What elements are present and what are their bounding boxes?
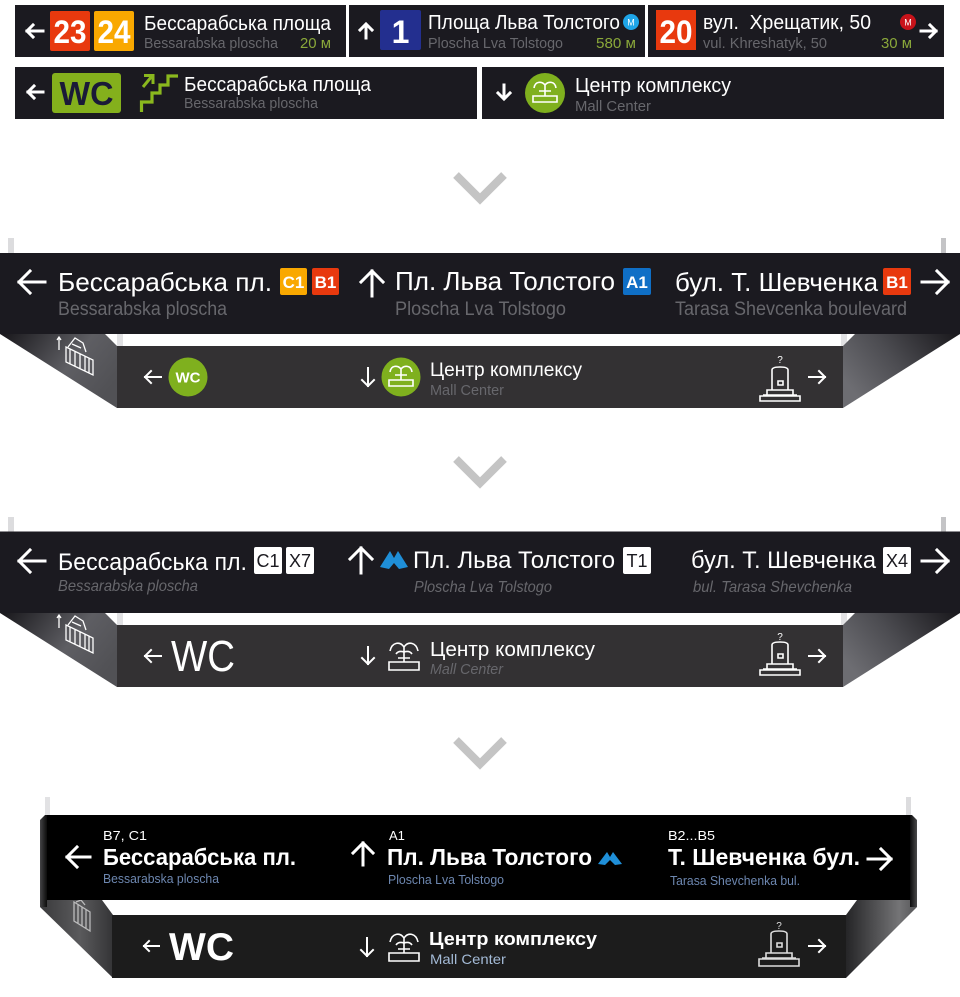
sign: Mall Center: Mall Center (575, 98, 651, 115)
sign: WC and stairs: Bessarabska ploscha (184, 95, 319, 112)
side panel: left (40, 900, 113, 978)
upper sign board: Пл. Льва Толстого (395, 266, 615, 296)
upper sign board: Пл. Льва Толстого (387, 844, 592, 870)
lower sign board: Mall Center (430, 951, 506, 967)
sign: Ploscha Lva Tolstogo: Ploscha Lva Tolstogo (428, 35, 563, 52)
lower sign board: Центр комплексу (429, 929, 597, 949)
upper sign board: C1 (283, 273, 304, 292)
arrow: chevron 2 (456, 459, 504, 483)
side panel: left (0, 334, 117, 408)
lower sign board (117, 346, 843, 408)
panel: sign option A (0, 238, 960, 408)
upper sign board: Tarasa Shevcenka boulevard (675, 299, 907, 320)
sign: Bessarabska ploscha: 23 (54, 14, 86, 50)
upper sign board: A1 (389, 828, 405, 843)
lower sign board: WC (169, 926, 234, 969)
sign: vul. Khreshatyk: 30 м (881, 35, 912, 52)
sign: WC and stairs: Бессарабська площа (184, 74, 372, 96)
sign: Ploscha Lva Tolstogo (349, 5, 645, 57)
upper sign board: bul. Tarasa Shevchenka (693, 579, 852, 596)
sign: WC and stairs: WC (60, 75, 114, 112)
upper sign board: Ploscha Lva Tolstogo (388, 872, 504, 887)
lower sign board (117, 625, 843, 687)
lower sign board (112, 915, 846, 978)
sign: Bessarabska ploscha: Bessarabska ploscha (144, 35, 279, 52)
side panel: left (0, 613, 117, 687)
sign: Bessarabska ploscha (15, 5, 346, 57)
upper sign board: Т. Шевченка бул. (668, 844, 860, 870)
lower sign board: WC (171, 632, 235, 681)
upper sign board: Ploscha Lva Tolstogo (414, 579, 552, 596)
upper sign board: Bessarabska ploscha (58, 299, 227, 320)
upper sign board: B1 (886, 273, 908, 292)
icon: metro M (380, 551, 408, 569)
upper sign board: T1 (626, 551, 648, 571)
upper sign board: B7, C1 (103, 828, 147, 843)
lower sign board: ? (776, 921, 782, 932)
side panel: right (843, 334, 960, 408)
upper sign board: B2...B5 (668, 828, 715, 843)
upper sign board: C1 (256, 551, 280, 571)
upper sign board: Tarasa Shevchenka bul. (670, 873, 800, 888)
upper sign board: бул. Т. Шевченка (691, 547, 877, 574)
upper sign board: X7 (289, 551, 311, 571)
icon: metro M (598, 852, 622, 865)
sign: Mall Center: Центр комплексу (575, 75, 731, 97)
upper sign board (0, 532, 960, 613)
sign: vul. Khreshatyk: 20 (660, 14, 692, 50)
panel: sign option B (0, 517, 960, 687)
upper sign board: Bessarabska ploscha (103, 871, 220, 886)
upper sign board: A1 (626, 273, 648, 292)
sign: vul. Khreshatyk: вул. Хрещатик, 50 (703, 12, 871, 34)
panel: top row signs (15, 5, 944, 119)
sign: Bessarabska ploscha: 20 м (300, 35, 331, 52)
panel: sign final (40, 797, 917, 978)
sign: Bessarabska ploscha: Бессарабська площа (144, 13, 332, 35)
upper sign board: B1 (315, 273, 336, 292)
arrow: chevron 3 (456, 740, 504, 764)
sign: vul. Khreshatyk: vul. Khreshatyk, 50 (703, 35, 827, 52)
sign: Bessarabska ploscha: 24 (98, 14, 131, 50)
sign: WC and stairs (15, 67, 477, 119)
lower sign board: ? (777, 355, 783, 366)
lower sign board: ? (777, 632, 783, 643)
lower sign board: Mall Center (430, 661, 504, 678)
upper sign board (40, 815, 917, 907)
arrow: chevron 1 (456, 175, 504, 199)
upper sign board: Бессарабська пл. (58, 549, 247, 576)
upper sign board: X4 (886, 551, 908, 571)
sign: Mall Center (482, 67, 944, 119)
sign: vul. Khreshatyk: M (904, 18, 912, 28)
side panel: right (846, 900, 917, 978)
lower sign board: Центр комплексу (430, 639, 595, 661)
lower sign board: Mall Center (430, 382, 504, 399)
sign: Ploscha Lva Tolstogo: 580 м (596, 35, 636, 52)
lower sign board: WC (176, 370, 201, 386)
sign: Ploscha Lva Tolstogo: 1 (392, 14, 409, 50)
upper sign board (0, 253, 960, 334)
upper sign board: Пл. Льва Толстого (413, 547, 615, 574)
upper sign board: Bessarabska ploscha (58, 578, 198, 595)
sign: Ploscha Lva Tolstogo: M (627, 18, 635, 28)
upper sign board: Бессарабська пл. (58, 267, 272, 297)
lower sign board: Центр комплексу (430, 360, 582, 381)
side panel: right (843, 613, 960, 687)
upper sign board: бул. Т. Шевченка (675, 267, 879, 297)
sign: Ploscha Lva Tolstogo: Площа Льва Толстого (428, 12, 620, 34)
sign: vul. Khreshatyk (648, 5, 944, 57)
upper sign board: Ploscha Lva Tolstogo (395, 299, 566, 320)
upper sign board: Бессарабська пл. (103, 844, 296, 870)
